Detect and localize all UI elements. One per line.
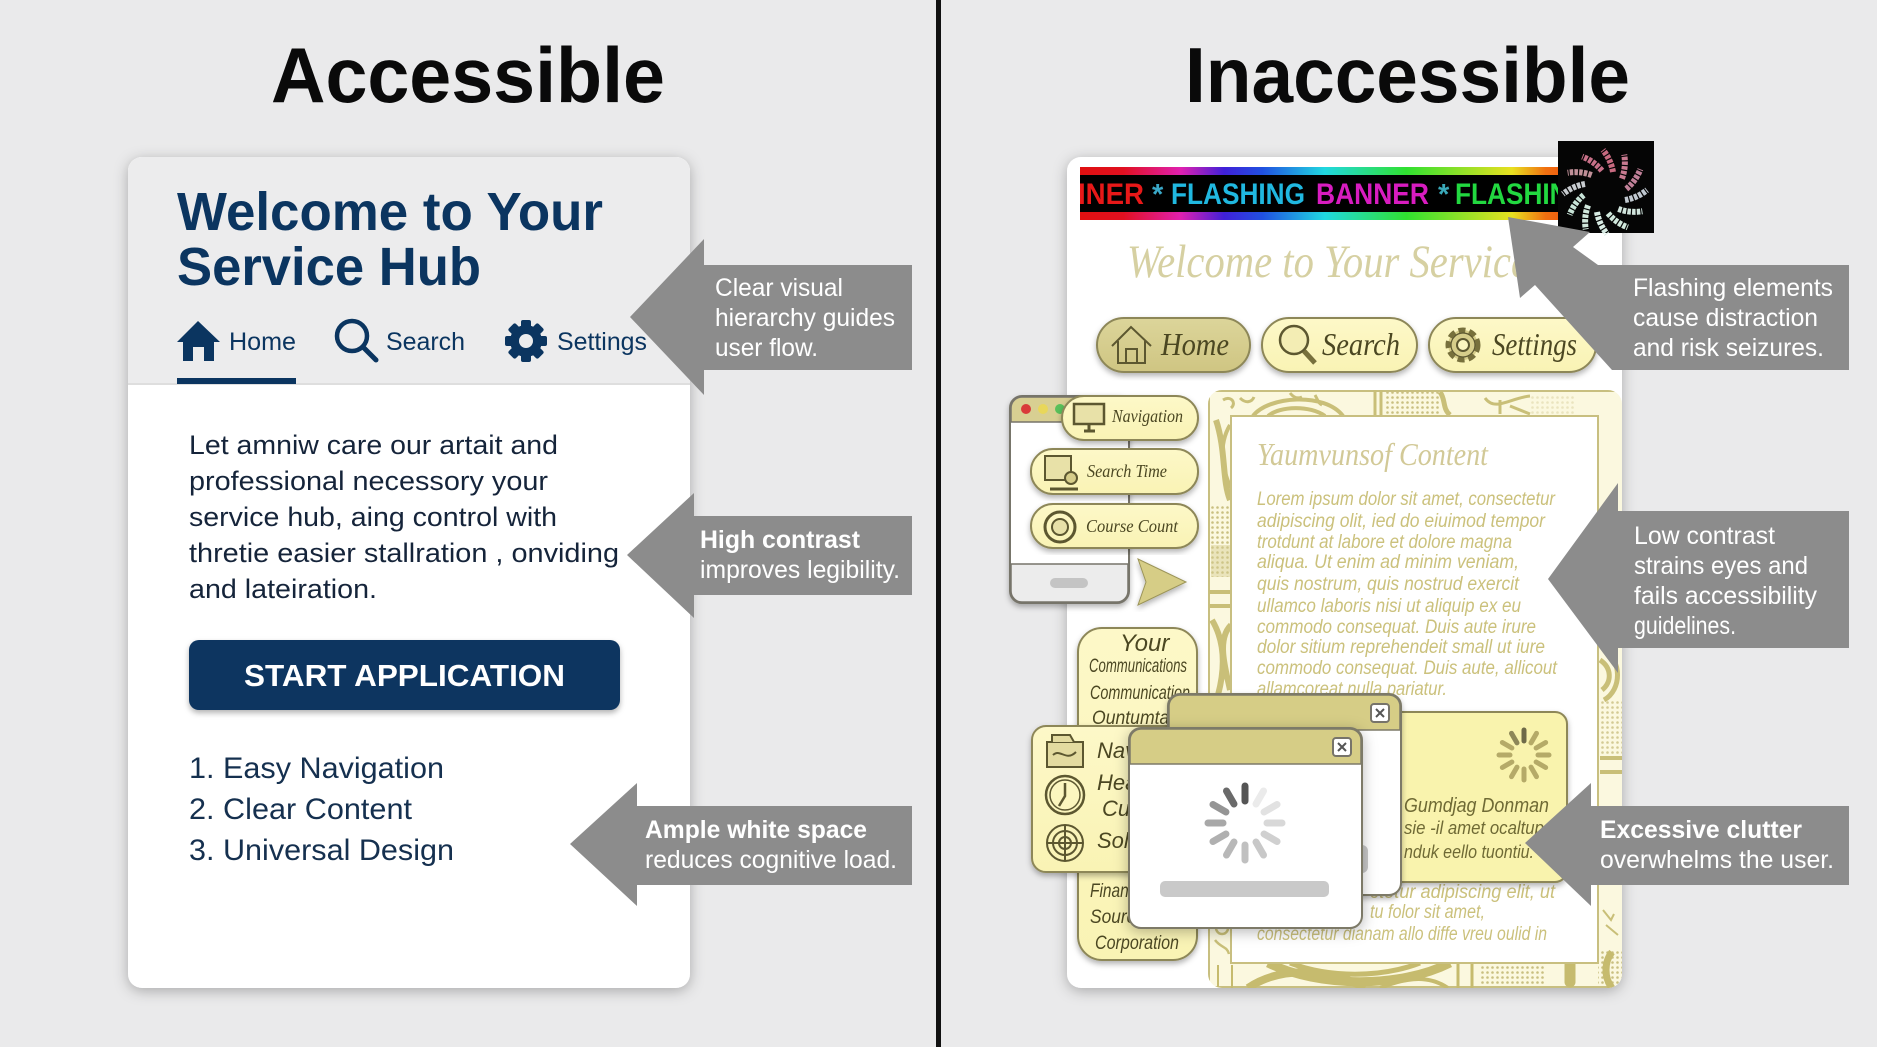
callout: flashing elements: and risk seizures.: [1633, 334, 1824, 362]
flashing banner: *: [1152, 179, 1164, 211]
tall yellow menu: Finance: [1090, 881, 1145, 902]
pill: navigation: Navigation: [1111, 406, 1183, 426]
callout: high contrast: [627, 493, 912, 618]
center divider: [936, 0, 941, 1047]
button: start application: START APPLICATION: [244, 658, 565, 693]
content lorem text: commodo consequat. Duis aute, allicout: [1257, 658, 1558, 679]
callout: flashing elements: cause distraction: [1633, 304, 1818, 332]
callout: high contrast: High contrast: [700, 526, 861, 554]
panel: accessible mockup: [128, 157, 690, 988]
nav: search: Search: [386, 328, 465, 356]
content lorem text: trotdunt at labore et dolore magna: [1257, 532, 1512, 553]
tall yellow menu: Communication: [1090, 683, 1190, 704]
tall yellow menu: Ountumtais: [1092, 708, 1182, 729]
callout: low contrast: strains eyes and: [1634, 552, 1808, 580]
callout: excessive clutter: Excessive clutter: [1600, 816, 1802, 844]
button: start application: [189, 640, 620, 710]
yellow card with spinner: Gumdjag Donman: [1404, 795, 1549, 817]
callout: visual hierarchy: [630, 239, 912, 395]
icon: folder: [1047, 735, 1083, 767]
flashing banner: BANNER: [1316, 178, 1429, 211]
content lorem text: commodo consequat. Duis aute irure: [1257, 617, 1536, 638]
content lorem text: adipiscing olit, ied do eiuimod tempor: [1257, 511, 1546, 532]
content heading: Yaumvunsof Content: [1257, 436, 1489, 472]
tall yellow menu: Source: [1090, 907, 1145, 928]
heading: welcome: Service Hub: [177, 237, 481, 297]
content lorem text: [1257, 489, 1558, 945]
content lorem text: aliqua. Ut enim ad minim veniam,: [1257, 552, 1519, 573]
nav pill: home: [1097, 318, 1250, 372]
nav: home: [177, 321, 296, 384]
pill: search time: [1031, 449, 1198, 494]
callout: low contrast: Low contrast: [1634, 522, 1775, 550]
title: Inaccessible: Inaccessible: [1185, 31, 1630, 119]
content lorem text: quis nostrum, quis nostrud exercit: [1257, 574, 1520, 595]
popup: back window: [1168, 694, 1401, 895]
nav pill: home: Home: [1160, 326, 1229, 362]
icon: loading spinner: [1208, 786, 1282, 860]
callout: low contrast: [1548, 483, 1849, 673]
icon: small spinner: [1499, 730, 1549, 780]
nav: settings: [505, 320, 647, 362]
content lorem text: dolor sitium reprehendeit small ut iure: [1257, 637, 1545, 658]
yellow icon card: Navi: [1097, 738, 1142, 763]
icon: clock: [1046, 776, 1084, 814]
pill: course count: [1031, 504, 1198, 548]
callout: visual hierarchy: user flow.: [715, 334, 818, 362]
arrow: gold triangle: [1138, 559, 1186, 605]
yellow card with spinner: sie -il amet ocaltup: [1404, 818, 1544, 838]
nav pill: search: Search: [1322, 326, 1400, 362]
pill: navigation: [1062, 396, 1198, 440]
tall yellow menu: Corporation: [1095, 933, 1179, 954]
callout: flashing elements: Flashing elements: [1633, 274, 1833, 302]
callout: low contrast: fails accessibility: [1634, 582, 1817, 610]
side window: [1010, 396, 1198, 603]
tall yellow menu: [1078, 628, 1197, 960]
body text: Let amniw care our artait and: [189, 430, 558, 460]
content panel: [1231, 416, 1598, 963]
body text: and lateiration.: [189, 574, 377, 604]
callout: white space: reduces cognitive load.: [645, 846, 897, 874]
callout: low contrast: guidelines.: [1634, 612, 1736, 640]
yellow card with spinner: [1300, 712, 1567, 882]
flashing banner: FLASHING: [1455, 178, 1589, 211]
content lorem text: tu folor sit amet,: [1370, 902, 1485, 923]
numbered list: [189, 752, 454, 867]
heading: script welcome: Welcome to Your Service: [1127, 236, 1529, 288]
panel: inaccessible mockup: [1010, 157, 1629, 988]
nav pill: settings: [1429, 318, 1596, 372]
nav pill: search: [1262, 318, 1417, 372]
callout: visual hierarchy: Clear visual: [715, 274, 843, 302]
body text: [189, 430, 619, 604]
tall yellow menu: Your: [1120, 630, 1170, 657]
yellow icon card: Solt: [1097, 828, 1136, 853]
flashing banner: INER: [1078, 178, 1144, 211]
nav: search: [337, 321, 465, 360]
body text: service hub, aing control with: [189, 502, 557, 532]
callout: excessive clutter: [1525, 783, 1849, 906]
content lorem text: allamcoreat nulla pariatur.: [1257, 679, 1447, 700]
content lorem text: ullamco laboris nisi ut aliquip ex eu: [1257, 596, 1521, 617]
body text: professional necessory your: [189, 466, 548, 496]
icon: globe: [1047, 825, 1083, 861]
callout: visual hierarchy: hierarchy guides: [715, 304, 895, 332]
heading: welcome: [177, 182, 603, 297]
nav: home: Home: [229, 328, 296, 356]
ornate background: [1208, 390, 1629, 988]
icon: flashing spiral: [1558, 141, 1654, 234]
tall yellow menu: Communications: [1089, 656, 1187, 677]
popup: front window: [1129, 728, 1362, 928]
numbered list: 2. Clear Content: [189, 793, 413, 826]
yellow icon card: [1032, 726, 1192, 872]
pill: search time: Search Time: [1087, 461, 1167, 481]
title: Accessible: Accessible: [271, 31, 665, 119]
callout: flashing elements: [1508, 217, 1849, 370]
content lorem text: Lorem ipsum dolor sit amet, consectetur: [1257, 489, 1556, 510]
flashing banner: [1078, 167, 1589, 220]
yellow icon card: Cu: [1102, 796, 1130, 821]
callout: high contrast: improves legibility.: [700, 556, 900, 584]
numbered list: 1. Easy Navigation: [189, 752, 444, 785]
flashing banner: *: [1438, 179, 1450, 211]
callout: white space: Ample white space: [645, 816, 867, 844]
pill: course count: Course Count: [1086, 516, 1179, 536]
heading: welcome: Welcome to Your: [177, 182, 603, 242]
progress bar: [1160, 881, 1329, 897]
callout: white space: [570, 783, 912, 906]
nav pill: settings: Settings: [1492, 326, 1577, 362]
yellow card with spinner: nduk eello tuontiu.: [1404, 842, 1534, 862]
yellow icon card: Hea: [1097, 770, 1137, 795]
nav: settings: Settings: [557, 328, 647, 356]
callout: excessive clutter: overwhelms the user.: [1600, 846, 1834, 874]
numbered list: 3. Universal Design: [189, 834, 454, 867]
flashing banner: FLASHING: [1171, 178, 1305, 211]
content lorem text: ctetur adipiscing elit, ut: [1370, 882, 1556, 903]
content lorem text: consectetur dianam allo diffe vreu oulid in: [1257, 924, 1547, 945]
body text: thretie easier stallration , onviding: [189, 538, 619, 568]
